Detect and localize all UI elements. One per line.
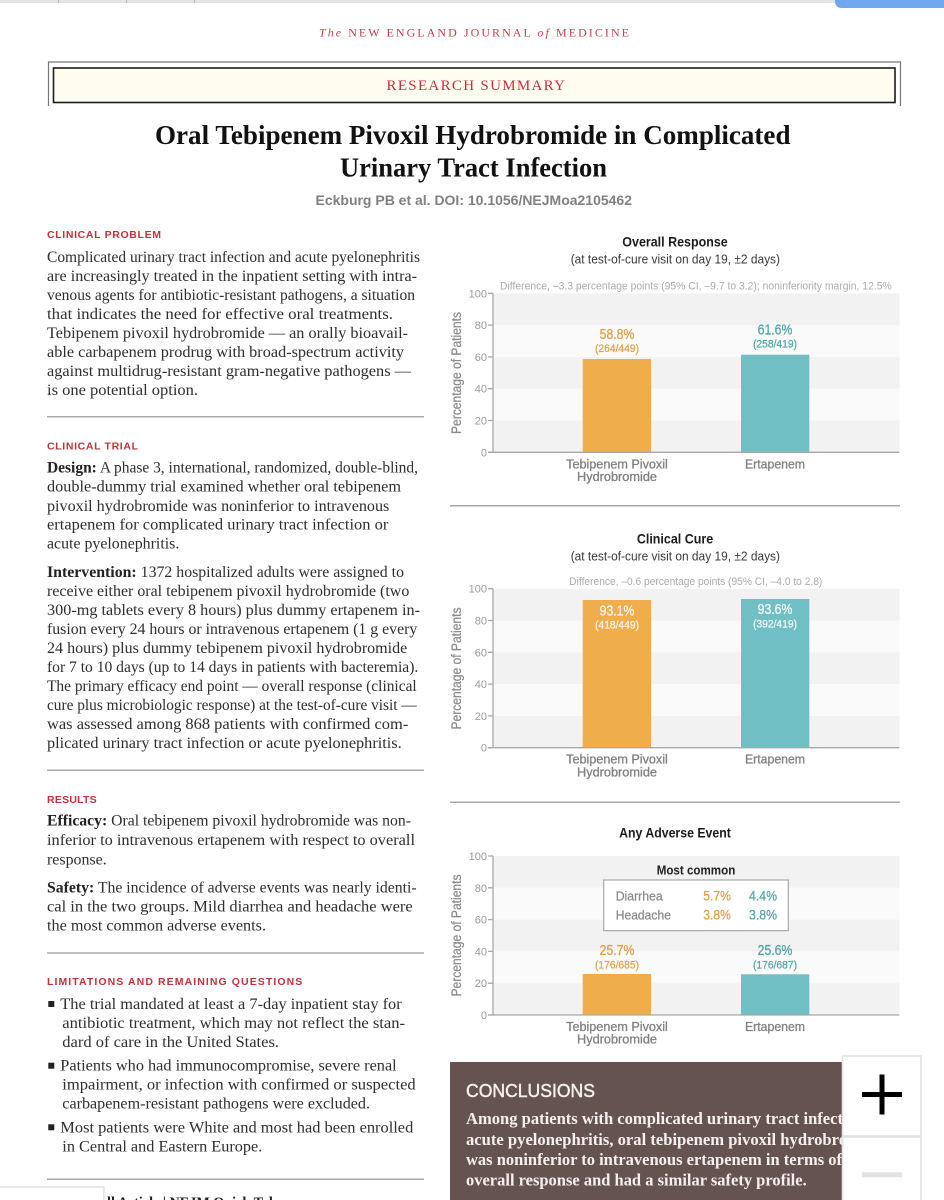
chart heading: (at test-of-cure visit on day 19, ±2 days) [571,548,780,563]
text block: clinical problem: Tebipenem pivoxil hydrobromide — an orally bioavail- [47,325,408,342]
zoom out button [842,1137,921,1200]
category labels [566,752,805,779]
chart heading: Overall Response [622,234,728,250]
text block: intervention: plicated urinary tract infection or acute pyelonephritis. [47,735,402,752]
conclusions text: acute pyelonephritis, oral tebipenem pivoxil hydrobro [466,1130,847,1149]
text block: safety: Safety: The incidence of adverse events was nearly identi- [47,880,417,897]
panel: clinical trial [47,440,420,752]
table: most common adverse events: 5.7% [703,889,731,904]
text block: intervention: fusion every 24 hours or intravenous ertapenem (1 g every [47,621,418,638]
citation: Eckburg PB et al. DOI: 10.1056/NEJMoa2105462 [316,192,632,208]
text block: clinical problem: is one potential option. [47,382,198,399]
table: most common adverse events: Diarrhea [616,889,663,904]
plot bands [493,589,900,748]
category labels: Ertapenem [745,1019,805,1034]
chart heading [571,234,780,266]
bar: ertapenem: 25.6% [758,943,792,959]
bar: ertapenem: 61.6% [758,322,792,338]
conclusions text: Among patients with complicated urinary tract infect [466,1109,843,1128]
category labels: Hydrobromide [577,1032,657,1047]
difference note: Difference, –0.6 percentage points (95% CI, –4.0 to 2.8) [569,576,822,588]
browser tab strip [0,0,944,8]
bar: tebipenem: 58.8% [600,327,634,343]
y axis [449,288,493,459]
bullet: inpatient stay: The trial mandated at least a 7-day inpatient stay for [60,996,402,1013]
panel: clinical problem [47,229,420,399]
y axis: 40 [475,679,487,691]
journal masthead: The NEW ENGLAND JOURNAL of MEDICINE [319,26,629,40]
bar: tebipenem [583,600,651,748]
bar: tebipenem: 93.1% [600,604,634,620]
text block: clinical problem: against multidrug-resistant gram-negative pathogens — [47,363,412,380]
bar: tebipenem: 25.7% [600,943,634,959]
chart heading: (at test-of-cure visit on day 19, ±2 days) [571,251,780,266]
y axis: 20 [475,416,487,428]
footer link fragment [0,1187,283,1200]
category labels: Hydrobromide [577,764,657,779]
y axis: 80 [475,616,487,628]
category labels: Ertapenem [745,752,805,767]
text block: clinical problem: able carbapenem prodrug with broad-spectrum activity [47,344,404,361]
bar: tebipenem: (176/685) [595,959,639,971]
bullet: inpatient stay [48,996,405,1051]
text block: efficacy: inferior to intravenous ertapenem with respect to overall [47,832,415,849]
difference note: Difference, –3.3 percentage points (95% CI, –9.7 to 3.2); noninferiority margin, 12.5% [500,280,892,292]
bar: ertapenem: (258/419) [753,339,797,351]
y axis: 80 [475,320,487,332]
conclusions text: overall response and had a similar safety profile. [466,1171,807,1190]
text block: clinical problem: venous agents for antibiotic-resistant pathogens, a situation [47,287,415,304]
y axis: 80 [475,883,487,895]
y axis: 20 [475,711,487,723]
y axis: 40 [475,946,487,958]
bullet: inpatient stay: antibiotic treatment, which may not reflect the stan- [62,1015,405,1032]
y axis: 0 [481,1010,487,1022]
bar: ertapenem [741,599,809,748]
text block: design: acute pyelonephritis. [47,536,179,553]
title [155,119,790,183]
table: most common adverse events: 3.8% [749,907,777,922]
text block: clinical problem: are increasingly treated in the inpatient setting with intra- [47,268,417,285]
chart heading: Any Adverse Event [619,824,731,840]
category labels: Tebipenem Pivoxil [566,456,668,471]
chart heading: Clinical Cure [637,531,713,547]
y axis: 0 [481,743,487,755]
text block: design: Design: A phase 3, international, randomized, double-blind, [47,460,418,477]
text block: intervention: Intervention: 1372 hospitalized adults were assigned to [47,564,404,581]
panel: results [47,794,417,935]
text block: intervention: for 7 to 10 days (up to 14 days in patients with bacteremia). [47,659,418,676]
text block: intervention: receive either oral tebipenem pivoxil hydrobromide (two [47,583,410,600]
title: Oral Tebipenem Pivoxil Hydrobromide in Complicated [155,119,790,150]
conclusions heading: CONCLUSIONS [466,1081,595,1101]
text block: intervention: The primary efficacy end point — overall response (clinical [47,678,417,695]
title: Urinary Tract Infection [340,152,607,183]
heading: results: RESULTS [47,794,97,806]
category labels: Ertapenem [745,456,805,471]
chart: any adverse event [449,824,900,1047]
plot bands [493,293,900,452]
bar: tebipenem [583,943,651,1015]
bullet: inpatient stay: dard of care in the United States. [62,1034,279,1051]
panel: conclusions [450,1062,847,1200]
table: most common adverse events [604,862,788,931]
zoom in button [842,1056,921,1136]
text block: safety: cal in the two groups. Mild diarrhea and headache were [47,899,413,916]
chart: clinical cure [449,531,900,779]
bullet: enrollment: in Central and Eastern Europe. [62,1138,262,1155]
chart heading [571,531,780,563]
y axis: 100 [469,851,487,863]
y axis: 40 [475,384,487,396]
bar: ertapenem [741,322,809,452]
text block: efficacy [47,813,415,868]
y axis: 0 [481,447,487,459]
y axis: 60 [475,647,487,659]
bar: tebipenem: (418/449) [595,620,639,632]
y axis: 100 [469,288,487,300]
bullet: enrollment: Most patients were White and most had been enrolled [60,1119,414,1136]
bullet: exclusions: carbapenem-resistant pathogens were excluded. [62,1096,370,1113]
category labels: Tebipenem Pivoxil [566,752,668,767]
y axis: 20 [475,978,487,990]
y axis: 60 [475,352,487,364]
bullet: enrollment [48,1119,414,1155]
y axis: 100 [469,584,487,596]
heading: clinical problem: CLINICAL PROBLEM [47,229,161,241]
panel: limitations and remaining questions [47,976,416,1155]
bar: ertapenem [741,943,809,1015]
bar: ertapenem: 93.6% [758,602,792,618]
text block: intervention: was assessed among 868 patients with confirmed com- [47,716,408,733]
table: most common adverse events: 3.8% [703,907,731,922]
text block: clinical problem [47,249,420,399]
bar: ertapenem: (176/687) [753,959,797,971]
bar: tebipenem: (264/449) [595,343,639,355]
text block: efficacy: response. [47,851,107,868]
conclusions text: was noninferior to intravenous ertapenem in terms of [466,1150,842,1169]
text block: safety [47,880,417,935]
bullet: exclusions: impairment, or infection with confirmed or suspected [62,1077,416,1094]
category labels [566,1019,805,1047]
text block: intervention: cure plus microbiologic response) at the test-of-cure visit — [47,697,417,714]
bullet: exclusions [48,1058,416,1113]
text block: safety: the most common adverse events. [47,918,266,935]
y axis: Percentage of Patients [449,607,464,730]
banner: research summary [48,62,900,106]
bullet: exclusions: Patients who had immunocompromise, severe renal [60,1058,397,1075]
heading: clinical trial: CLINICAL TRIAL [47,440,139,452]
text block: clinical problem: Complicated urinary tract infection and acute pyelonephritis [47,249,420,266]
text block: efficacy: Efficacy: Oral tebipenem pivoxil hydrobromide was non- [47,813,411,830]
category labels: Hydrobromide [577,469,657,484]
category labels: Tebipenem Pivoxil [566,1019,668,1034]
text block: intervention [47,564,420,752]
text block: design: pivoxil hydrobromide was noninferior to intravenous [47,498,389,515]
plot bands [493,856,900,1015]
text block: design [47,460,418,553]
category labels [566,456,805,484]
table: most common adverse events: Most common [657,862,735,877]
table: most common adverse events: Headache [616,907,671,922]
y axis [449,851,493,1022]
bar: tebipenem [583,327,651,452]
y axis: Percentage of Patients [449,312,464,434]
y axis [449,584,493,755]
text block: clinical problem: that indicates the need for effective oral treatments. [47,306,393,323]
y axis: 60 [475,915,487,927]
bar: ertapenem: (392/419) [753,618,797,630]
table: most common adverse events: 4.4% [749,889,777,904]
text block: intervention: 24 hours) plus dummy tebipenem pivoxil hydrobromide [47,640,407,657]
banner: research summary: RESEARCH SUMMARY [386,78,565,94]
text block: design: ertapenem for complicated urinary tract infection or [47,517,388,534]
text block: intervention: 300-mg tablets every 8 hours) plus dummy ertapenem in- [47,602,420,619]
y axis: Percentage of Patients [449,874,464,996]
chart: overall response [449,234,900,484]
heading: limitations: LIMITATIONS AND REMAINING QUESTIONS [47,976,302,988]
conclusions text [466,1109,847,1190]
text block: design: double-dummy trial examined whether oral tebipenem [47,479,401,496]
